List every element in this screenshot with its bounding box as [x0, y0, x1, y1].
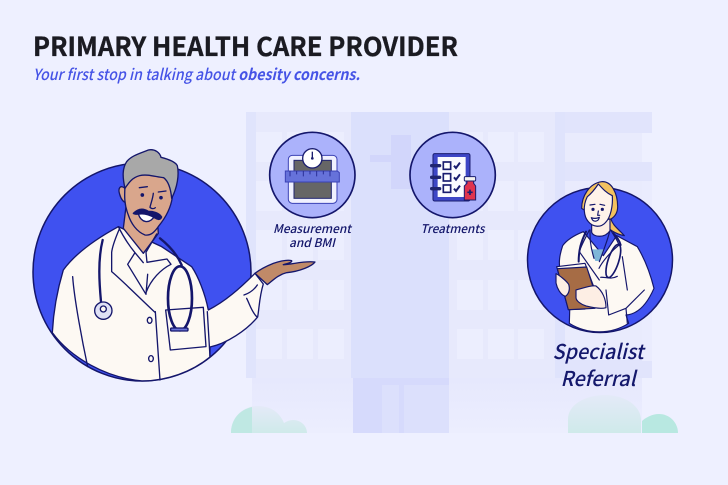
mouth — [591, 217, 599, 221]
neck — [123, 207, 158, 253]
pocket — [166, 307, 206, 350]
label: Measurement and BMI — [273, 220, 353, 251]
label: Measurement and BMI: Measurement — [273, 220, 353, 237]
lapels and collar — [112, 227, 171, 312]
left bushes — [231, 406, 307, 433]
hospital building background — [246, 112, 652, 433]
stethoscope — [99, 240, 103, 302]
hair — [123, 150, 178, 198]
coat — [559, 232, 654, 332]
label: Specialist Referral: Referral — [560, 362, 638, 392]
stethoscope — [579, 232, 586, 262]
illustration: male doctor in blue circle — [33, 150, 315, 381]
title: PRIMARY HEALTH CARE PROVIDER — [33, 27, 458, 64]
label: Specialist Referral — [552, 335, 646, 392]
mouth — [138, 213, 155, 222]
eyes and nose — [139, 187, 166, 209]
neck — [592, 219, 610, 236]
illustration: female doctor in blue circle — [528, 182, 672, 332]
buttons — [147, 317, 152, 323]
head — [119, 150, 178, 235]
icon: weighing scale and tape measure — [270, 132, 355, 218]
hands — [556, 274, 569, 296]
mustache — [133, 209, 162, 219]
clipboard — [557, 263, 594, 310]
coat — [52, 227, 263, 381]
label: Measurement and BMI: and BMI — [289, 234, 336, 251]
subtitle: Your first stop in talking about obesity concerns. — [33, 63, 360, 85]
hair back — [582, 182, 624, 236]
label: Treatments: Treatments — [420, 220, 486, 237]
lapels — [579, 230, 619, 280]
face — [584, 184, 612, 226]
label: Specialist Referral: Specialist — [552, 335, 646, 365]
hand — [255, 260, 315, 285]
right bushes — [568, 395, 678, 433]
icon: treatments checklist and bottle — [410, 132, 495, 218]
shirt — [591, 249, 605, 261]
